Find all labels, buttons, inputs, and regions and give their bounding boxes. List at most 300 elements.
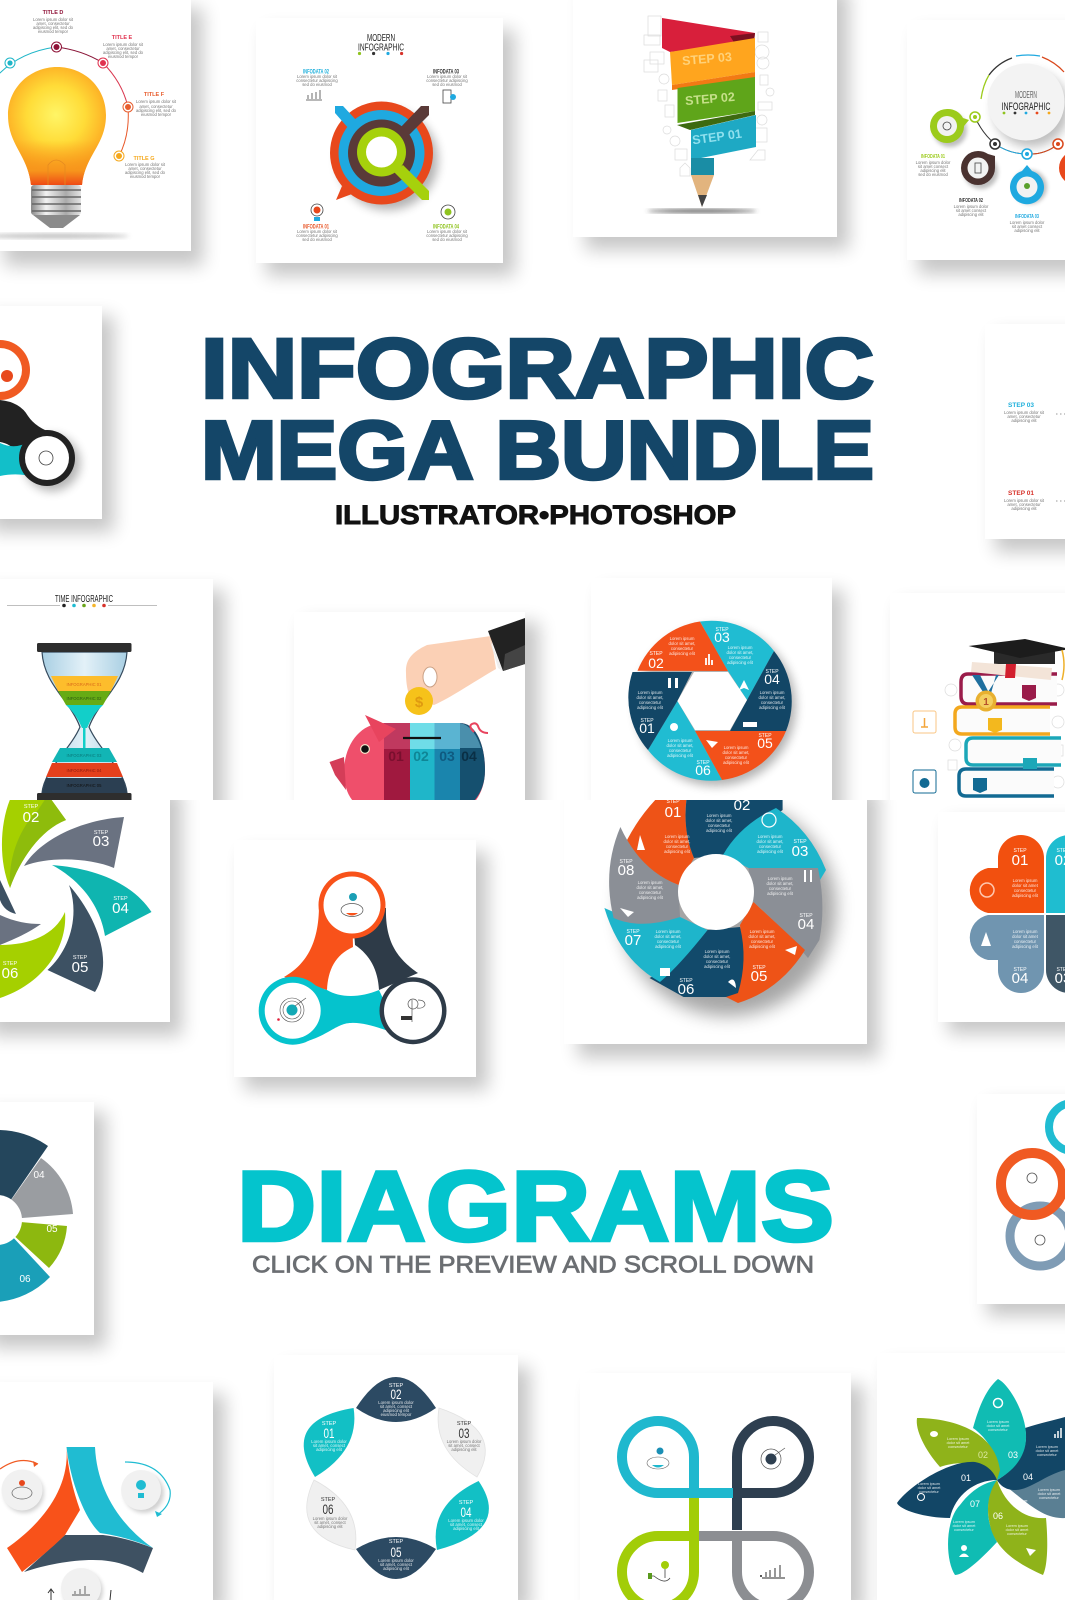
bulb labels: amet, consectetur	[128, 166, 162, 171]
chart: twisted ring: dolor sit amet,	[704, 954, 730, 959]
panel: star petals	[877, 1353, 1065, 1600]
chart: twisted ring: Lorem ipsum	[758, 834, 783, 839]
chart: twisted ring: consectetur	[769, 886, 792, 891]
chart: seven petals: dolor sit amet	[1038, 1492, 1061, 1496]
arc timeline	[0, 42, 133, 161]
infodata labels: sed do eiusmod	[432, 237, 462, 242]
chart: six leaves: Lorem ipsum dolor	[448, 1518, 484, 1523]
chart: twisted ring: adipiscing elit	[749, 944, 776, 949]
bulb labels: amet, consectetur	[106, 46, 140, 51]
chart: six leaves: STEP	[459, 1500, 474, 1506]
heading: modern infographic: MODERN	[367, 33, 395, 44]
chart: piggy body stripes: 03	[439, 748, 455, 764]
step text: Lorem ipsum dolor sit	[1004, 410, 1045, 415]
node labels: INFODATA 03	[1015, 214, 1039, 220]
connector nodes	[970, 112, 1063, 159]
infodata labels: Lorem ipsum dolor sit	[427, 74, 468, 79]
infodata labels: consectetur adipiscing	[296, 78, 338, 83]
chart: twisted ring: 02	[734, 797, 750, 814]
chart: twisted ring: dolor sit amet,	[706, 818, 732, 823]
chart: concentric target	[330, 102, 438, 210]
step text: amet, consectetur	[1007, 414, 1041, 419]
chart: seven petals: Lorem ipsum	[1036, 1445, 1058, 1449]
chart: six leaves: 05	[390, 1544, 402, 1560]
node labels: adipiscing elit	[920, 168, 946, 173]
chart: twisted ring: STEP	[619, 859, 633, 865]
chart: twisted ring: Lorem ipsum	[768, 876, 793, 881]
chart: six leaves: 01	[324, 1425, 335, 1441]
heading: diagrams: DIAGRAMS	[237, 1150, 834, 1262]
diagram: triad fragment	[0, 340, 80, 491]
infodata labels: INFODATA 04	[433, 224, 459, 230]
chart: twisted ring: Lorem ipsum	[665, 834, 690, 839]
chart: six leaves: 06	[322, 1501, 334, 1517]
chart: six blade swirl: STEP	[73, 955, 88, 961]
chart: six leaves: 04	[460, 1504, 472, 1520]
ribbon: pencil bands	[647, 18, 757, 213]
chart: twisted ring: consectetur	[759, 844, 782, 849]
chart: twisted ring: 01	[665, 804, 681, 821]
chart: twisted ring: adipiscing elit	[704, 964, 731, 969]
step labels: STEP 02	[685, 90, 735, 108]
bulb labels: Lorem ipsum dolor sit	[33, 17, 74, 22]
icon: light bulb	[0, 67, 129, 238]
step text: Lorem ipsum dolor sit	[1004, 498, 1045, 503]
chart: six segment wheel: Lorem ipsum	[670, 636, 695, 641]
node labels: Lorem ipsum dolor	[916, 160, 951, 165]
icon: stack of books	[955, 674, 1061, 796]
icon: target	[761, 1448, 785, 1469]
chart: four heart petals: adipiscing elit	[1012, 893, 1039, 898]
panel: triangle ribbon	[0, 1382, 225, 1600]
step labels	[682, 50, 743, 147]
chart: six blade swirl	[0, 795, 152, 998]
chart: six segment wheel: adipiscing elit	[759, 705, 786, 710]
chart: six segment wheel: adipiscing elit	[669, 651, 696, 656]
chart: four heart petals: adipiscing elit	[1012, 944, 1039, 949]
bulb labels: Lorem ipsum dolor sit	[125, 162, 166, 167]
chart: twisted ring: Lorem ipsum	[750, 929, 775, 934]
chart: six leaves: sit amet, consect	[314, 1520, 347, 1525]
chart: twisted ring: adipiscing elit	[655, 944, 682, 949]
chart: four heart petals: consectetur	[1014, 888, 1037, 893]
bulb labels: Lorem ipsum dolor sit	[136, 99, 177, 104]
chart: six leaves: adipiscing elit	[383, 1566, 410, 1571]
diagram: knot loops	[622, 1421, 809, 1600]
panel: target infographic	[256, 18, 515, 276]
chart: four heart petals: STEP	[1013, 848, 1027, 854]
chart: four heart petals: consectetur	[1014, 939, 1037, 944]
icon: piggy	[647, 1448, 669, 1469]
chart: seven petals: Lorem ipsum	[1006, 1524, 1028, 1528]
chart: twisted ring: 06	[678, 981, 694, 998]
chart: seven petals: 04	[1023, 1472, 1033, 1482]
step text	[1004, 402, 1065, 511]
chart: segmented pie	[0, 1130, 73, 1302]
chart: six leaves: Lorem ipsum dolor	[378, 1558, 414, 1563]
subtitle: illustrator photoshop: ILLUSTRATOR•PHOTOSHOP	[335, 500, 736, 530]
node labels: sit amet consect	[1012, 224, 1043, 229]
chart: four heart petals: STEP	[1013, 967, 1027, 973]
callout boxes	[913, 711, 936, 793]
infodata labels: Lorem ipsum dolor sit	[297, 74, 338, 79]
chart: six blade swirl: STEP	[113, 896, 128, 902]
step text: amet, consectetur	[1007, 502, 1041, 507]
chart: seven petals: dolor sit amet	[918, 1486, 941, 1490]
lower half of collage	[0, 790, 1065, 1600]
chart: six segment wheel: 06	[695, 762, 711, 778]
chart: twisted ring: dolor sit amet,	[664, 839, 690, 844]
infodata labels: Lorem ipsum dolor sit	[297, 229, 338, 234]
chart: six leaves: Lorem ipsum dolor	[447, 1439, 482, 1444]
chart: twisted ring: Lorem ipsum	[705, 949, 730, 954]
chart: twisted ring: STEP	[799, 913, 813, 919]
chart: six segment wheel: consectetur	[729, 655, 752, 660]
chart: six blade swirl: STEP	[3, 961, 18, 967]
chart: six leaves	[304, 1377, 489, 1579]
chart: twisted ring	[604, 795, 836, 1016]
node labels: Lorem ipsum dolor	[954, 204, 989, 209]
node labels: INFODATA 02	[959, 198, 983, 204]
chart: six segment wheel: STEP	[649, 651, 663, 657]
chart: twisted ring: 05	[751, 968, 767, 985]
chart: six blade swirl: 03	[93, 833, 109, 850]
chart: six leaves: adipiscing elit	[316, 1447, 343, 1452]
chart: six segment wheel: 01	[639, 720, 655, 736]
heading: time infographic	[7, 594, 157, 607]
infodata labels: INFODATA 02	[303, 70, 329, 76]
chart: piggy body stripes: 01	[388, 748, 404, 764]
chart: twisted ring: STEP	[752, 965, 766, 971]
chart: seven petals: Lorem ipsum	[918, 1482, 940, 1486]
chart: six segment wheel: adipiscing elit	[727, 660, 754, 665]
chart: six segment wheel: STEP	[640, 718, 654, 724]
chart: segmented pie: 06	[19, 1274, 31, 1285]
step text: adipiscing elit	[1011, 418, 1037, 423]
chart: six leaves: sit amet, consect	[313, 1443, 346, 1448]
upper half of collage	[0, 0, 1065, 842]
center circle	[988, 64, 1065, 147]
chart: twisted ring: adipiscing elit	[757, 849, 784, 854]
panel: pencil infographic	[573, 0, 849, 250]
chart: four heart petals: dolor sit amet	[1012, 934, 1039, 939]
chart: six segment wheel: adipiscing elit	[723, 760, 750, 765]
panel: swirl steps	[0, 790, 182, 1036]
doodles	[945, 684, 1064, 788]
step text: STEP 03	[1008, 402, 1034, 409]
chart: seven petals: consectetur	[1039, 1496, 1060, 1500]
chart: six segment wheel: Lorem ipsum	[724, 745, 749, 750]
chart: four heart petals: Lorem ipsum	[1013, 929, 1038, 934]
panel: left cropped triad	[0, 306, 114, 532]
chart: six leaves: Lorem ipsum dolor	[378, 1400, 414, 1405]
center circle: MODERN	[1015, 90, 1037, 101]
chart: twisted ring: consectetur	[639, 890, 662, 895]
chart: six leaves: sit amet, consect	[448, 1443, 481, 1448]
chart: seven petals: 05	[1018, 1499, 1028, 1509]
chart: segmented pie: 05	[46, 1224, 58, 1235]
infodata labels: INFODATA 01	[303, 224, 329, 230]
chart: seven petals: consectetur	[954, 1528, 975, 1532]
chart: six blade swirl: STEP	[94, 830, 109, 836]
infodata labels: INFODATA 03	[433, 70, 459, 76]
bulb labels	[33, 10, 177, 179]
chart: seven petals: dolor sit amet	[1036, 1449, 1059, 1453]
chart: six segment wheel: consectetur	[725, 755, 748, 760]
bulb labels: TITLE F	[144, 92, 165, 98]
bulb labels: adipiscing elit, sed do	[136, 108, 177, 113]
chart: piggy body stripes	[330, 715, 488, 800]
chart: piggy body stripes: 02	[413, 748, 429, 764]
chart: seven petals: consectetur	[1007, 1532, 1028, 1536]
panel: left pie segments	[0, 1102, 106, 1348]
chart: twisted ring: STEP	[666, 799, 680, 805]
step labels: STEP 01	[691, 127, 743, 147]
teardrop icons	[930, 109, 1065, 204]
icon: hand and plant	[648, 1561, 670, 1581]
chart: four heart petals: dolor sit amet	[1012, 883, 1039, 888]
infodata labels: Lorem ipsum dolor sit	[427, 229, 468, 234]
chart: twisted ring: 04	[798, 916, 814, 933]
chart: six segment wheel: 02	[648, 655, 664, 671]
infodata labels: consectetur adipiscing	[426, 78, 468, 83]
chart: seven petals: Lorem ipsum	[987, 1420, 1009, 1424]
icon: hand and idea	[401, 999, 425, 1022]
chart: twisted ring: STEP	[626, 929, 640, 935]
chart: six segment wheel: adipiscing elit	[637, 705, 664, 710]
chart: hourglass: INFOGRAPHIC 05	[67, 783, 102, 788]
bulb labels: eiusmod tempor	[108, 54, 139, 59]
panel: six leaf ring	[274, 1355, 530, 1600]
chart: six segment wheel: Lorem ipsum	[638, 690, 663, 695]
diagram: rings	[1001, 1103, 1065, 1266]
bulb labels: eiusmod tempor	[141, 112, 172, 117]
chart: twisted ring: adipiscing elit	[767, 891, 794, 896]
chart: six segment wheel: consectetur	[639, 700, 662, 705]
chart: twisted ring: consectetur	[706, 959, 729, 964]
chart: four heart petals: 01	[1012, 852, 1028, 869]
heading: modern infographic: INFOGRAPHIC	[358, 42, 404, 54]
chart: six blade swirl: 05	[72, 959, 88, 976]
chart: seven petals: Lorem ipsum	[953, 1520, 975, 1524]
step text: adipiscing elit	[1011, 506, 1037, 511]
chart: six segment wheel: dolor sit amet,	[758, 695, 786, 700]
chart: hourglass	[37, 643, 132, 801]
chart: six segment wheel: STEP	[765, 669, 779, 675]
chart: hourglass: INFOGRAPHIC 02	[67, 696, 102, 701]
chart: six segment wheel	[628, 621, 796, 786]
chart: seven petals: dolor sit amet	[953, 1524, 976, 1528]
chart: twisted ring: consectetur	[708, 823, 731, 828]
icon circles with arrows	[0, 1460, 170, 1600]
chart: twisted ring: Lorem ipsum	[707, 813, 732, 818]
chart: hourglass: INFOGRAPHIC 04	[67, 768, 102, 773]
chart: six leaves: sit amet, consect	[450, 1522, 483, 1527]
white petal icons	[918, 1398, 1061, 1557]
chart: seven petals: 02	[978, 1450, 988, 1460]
outer arc	[981, 55, 1064, 99]
chart: twisted ring: dolor sit amet,	[748, 934, 776, 939]
icon: bar chart	[760, 1565, 785, 1578]
bulb labels: eiusmod tempor	[130, 174, 161, 179]
panel: modern infographic circle nodes	[910, 54, 1065, 283]
node labels: Lorem ipsum dolor	[1010, 220, 1045, 225]
panel: right interlocked rings	[977, 1094, 1065, 1316]
icon: gold medal	[972, 675, 999, 712]
bulb labels: adipiscing elit, sed do	[103, 50, 144, 55]
chart: twisted ring: Lorem ipsum	[656, 929, 681, 934]
chart: six leaves: STEP	[457, 1421, 472, 1427]
panel: four loop knot	[580, 1373, 864, 1600]
chart: six leaves: STEP	[389, 1539, 404, 1545]
panel: hourglass infographic	[7, 582, 234, 800]
chart: twisted ring: consectetur	[751, 939, 774, 944]
chart: six segment wheel: dolor sit amet,	[636, 695, 664, 700]
chart: twisted ring: adipiscing elit	[637, 895, 664, 900]
chart: twisted ring: 03	[792, 843, 808, 860]
chart: six blade swirl: 02	[23, 809, 39, 826]
infodata labels: consectetur adipiscing	[426, 233, 468, 238]
chart: twisted ring: consectetur	[666, 844, 689, 849]
chart: six segment wheel: Lorem ipsum	[668, 738, 693, 743]
bulb labels: TITLE D	[43, 10, 63, 16]
chart: four heart petals: Lorem ipsum	[1013, 878, 1038, 883]
chart: seven petals: 07	[970, 1499, 980, 1509]
panel: clover diagram	[938, 812, 1065, 1034]
chart: six leaves: 02	[390, 1386, 402, 1402]
bulb labels: eiusmod tempor	[38, 29, 69, 34]
chart: twisted ring: STEP	[679, 978, 693, 984]
node labels: sit amet consect	[956, 208, 987, 213]
chart: seven petals: consectetur	[988, 1428, 1009, 1432]
node labels: INFODATA 01	[921, 154, 945, 160]
chart: six segment wheel: 04	[764, 671, 780, 687]
chart: seven petals: dolor sit amet	[1006, 1528, 1029, 1532]
chart: twisted ring: STEP	[793, 839, 807, 845]
icon: bookmarks	[973, 685, 1037, 793]
doodles	[644, 16, 774, 176]
chart: piggy body stripes: 04	[461, 748, 477, 764]
chart: seven petals: 01	[961, 1473, 971, 1483]
chart: four heart petals	[970, 835, 1065, 993]
icon: piggy	[341, 893, 363, 916]
chart: six segment wheel: 05	[757, 735, 773, 751]
node labels: sed do eiusmod	[918, 172, 948, 177]
panel: triad loop diagram	[234, 840, 488, 1090]
subheading: click on the preview: CLICK ON THE PREVIEW AND SCROLL DOWN	[252, 1252, 814, 1278]
chart: seven petals	[897, 1379, 1065, 1575]
bulb labels: Lorem ipsum dolor sit	[103, 42, 144, 47]
chart: hourglass: INFOGRAPHIC 03	[67, 753, 102, 758]
chart: seven petals: Lorem ipsum	[1038, 1488, 1060, 1492]
bulb labels: adipiscing elit, sed do	[33, 25, 74, 30]
chart: seven petals: consectetur	[1037, 1453, 1058, 1457]
chart: twisted ring: dolor sit amet,	[636, 885, 664, 890]
node labels: adipiscing elit	[1014, 228, 1040, 233]
chart: segmented pie: 04	[33, 1170, 45, 1181]
chart: six leaves: 03	[458, 1425, 470, 1441]
panel: right cropped steps	[986, 402, 1065, 561]
chart: six leaves: sit amet, consect	[380, 1562, 413, 1567]
chart: six blade swirl: STEP	[24, 804, 39, 810]
chart: six segment wheel: STEP	[715, 627, 729, 633]
heading: modern infographic	[358, 33, 404, 55]
chart: seven petals: consectetur	[919, 1490, 940, 1494]
bulb labels: adipiscing elit, sed do	[125, 170, 166, 175]
chart: six segment wheel: dolor sit amet,	[726, 650, 754, 655]
chart: six leaves: STEP	[322, 1421, 337, 1427]
panel: light bulb infographic	[0, 0, 203, 266]
icon: graduation cap and diploma	[969, 639, 1065, 680]
node labels	[916, 154, 1045, 233]
chart: six segment wheel: Lorem ipsum	[728, 645, 753, 650]
chart: six leaves: STEP	[389, 1383, 404, 1389]
chart: twisted ring: dolor sit amet,	[654, 934, 682, 939]
chart: six segment wheel: STEP	[758, 733, 772, 739]
chart: four heart petals: 04	[1012, 970, 1028, 987]
chart: seven petals: dolor sit amet	[947, 1441, 970, 1445]
chart: six leaves: adipiscing elit	[453, 1526, 480, 1531]
chart: six leaves: eiusmod tempor	[381, 1412, 412, 1417]
title: infographic mega bundle	[205, 336, 874, 482]
chart: six segment wheel: consectetur	[671, 646, 694, 651]
chart: seven petals: consectetur	[948, 1445, 969, 1449]
bulb labels: TITLE E	[112, 35, 133, 41]
chart: twisted ring: adipiscing elit	[664, 849, 691, 854]
chart: six leaves: Lorem ipsum dolor	[313, 1516, 348, 1521]
chart: twisted ring: Lorem ipsum	[638, 880, 663, 885]
icon: hand with coin: $	[415, 694, 424, 711]
chart: twisted ring: consectetur	[657, 939, 680, 944]
chart: twisted ring: dolor sit amet,	[766, 881, 794, 886]
chart: six leaves: adipiscing elit	[383, 1408, 410, 1413]
diagram: three linked circles	[259, 872, 446, 1045]
bulb labels: TITLE G	[133, 156, 155, 162]
chart: twisted ring: 07	[625, 932, 641, 949]
chart: seven petals: dolor sit amet	[987, 1424, 1010, 1428]
node labels: adipiscing elit	[958, 212, 984, 217]
chart: six segment wheel: dolor sit amet,	[722, 750, 750, 755]
panel: piggy bank infographic	[330, 614, 548, 800]
chart: six segment wheel: Lorem ipsum	[760, 690, 785, 695]
step labels: STEP 03	[682, 50, 732, 68]
panel: eight step ring	[564, 790, 879, 1058]
bulb labels: amet, consectetur	[139, 104, 173, 109]
infodata labels	[296, 70, 468, 242]
chart: six segment wheel: adipiscing elit	[667, 753, 694, 758]
chart: six leaves: Lorem ipsum dolor	[311, 1439, 347, 1444]
chart: twisted ring: 08	[618, 862, 634, 879]
title: infographic mega bundle: MEGA BUNDLE	[201, 404, 874, 496]
chart: six segment wheel: consectetur	[761, 700, 784, 705]
panel: hexagon wheel	[628, 582, 853, 800]
chart: six segment wheel: STEP	[696, 760, 710, 766]
infodata labels: sed do eiusmod	[432, 82, 462, 87]
chart: six leaves: sit amet, consect	[380, 1404, 413, 1409]
chart: six leaves: adipiscing elit	[451, 1447, 477, 1452]
chart: seven petals: 03	[1008, 1450, 1018, 1460]
chart: seven petals: 06	[993, 1511, 1003, 1521]
chart: six blade swirl: 04	[112, 900, 129, 917]
chart: six segment wheel: dolor sit amet,	[668, 641, 696, 646]
diagram: triangle ribbon	[7, 1447, 153, 1573]
infodata labels: sed do eiusmod	[302, 237, 332, 242]
bulb labels: amet, consectetur	[36, 21, 70, 26]
chart: twisted ring: adipiscing elit	[706, 828, 733, 833]
chart: hourglass: INFOGRAPHIC 01	[67, 682, 102, 687]
chart: six leaves: STEP	[321, 1497, 336, 1503]
icon: hand with coin	[405, 618, 525, 715]
